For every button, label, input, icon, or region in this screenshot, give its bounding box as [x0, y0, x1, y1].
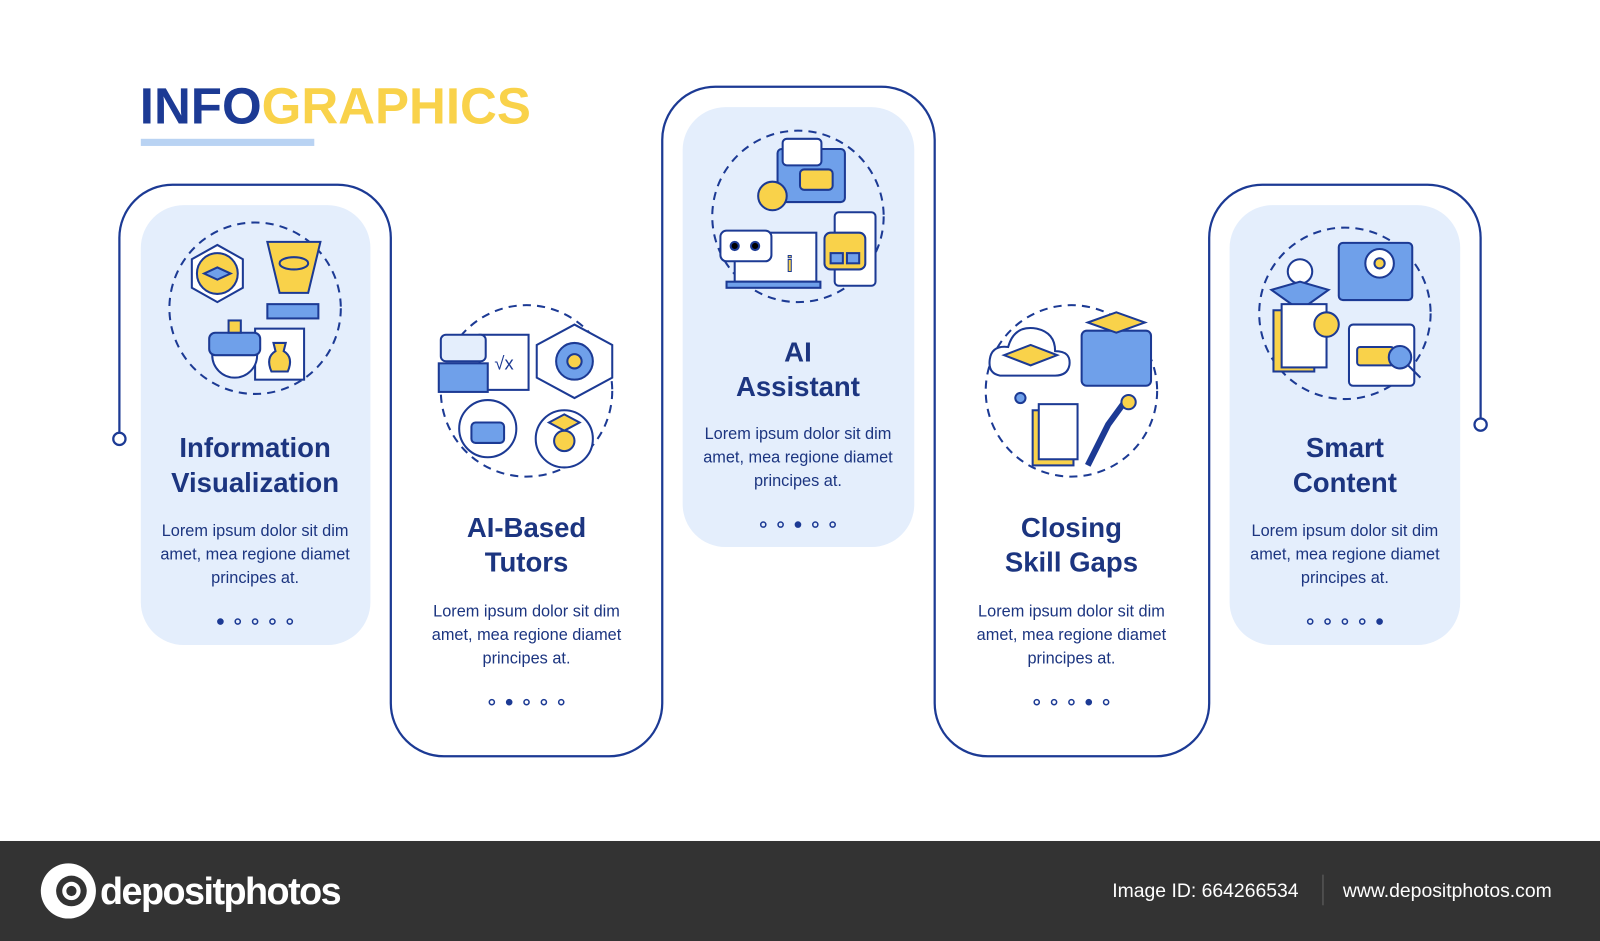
heading: Closing [1021, 512, 1122, 543]
text block: Lorem ipsum dolor sit dim [705, 425, 891, 443]
icon: camera logo [41, 863, 96, 919]
text block [703, 425, 893, 490]
text block: principes at. [483, 649, 571, 667]
panel: Closing Skill Gaps [977, 305, 1167, 705]
text block [432, 602, 622, 667]
panel: AI Assistant [703, 131, 893, 527]
text block: Lorem ipsum dolor sit dim [978, 602, 1165, 620]
panel: AI Assistant: Assistant [736, 371, 860, 402]
text block [160, 522, 350, 587]
dots [1034, 700, 1109, 705]
heading: Smart [1306, 432, 1384, 463]
icon: information visualization [169, 222, 341, 394]
text block: amet, mea regione diamet [703, 448, 893, 466]
connecting outline [113, 87, 1487, 756]
icon: smart content [1259, 228, 1431, 399]
icon: ai assistant [712, 131, 884, 302]
panel: AI-Based Tutors: Tutors [485, 547, 568, 578]
heading: AI [784, 336, 812, 367]
text block: Lorem ipsum dolor sit dim [433, 602, 620, 620]
panel: Information Visualization [160, 222, 350, 624]
text block: Lorem ipsum dolor sit dim [1252, 522, 1438, 540]
text block [977, 602, 1167, 667]
icon: skill gaps [986, 305, 1157, 477]
icon: ai tutors [439, 305, 612, 477]
dots [489, 700, 564, 705]
text block: Lorem ipsum dolor sit dim [162, 522, 348, 540]
text block: principes at. [754, 472, 842, 490]
heading: AI-Based [467, 512, 586, 543]
panel: Information Visualization: Visualization [171, 467, 339, 498]
text block: principes at. [1301, 569, 1389, 587]
text block: principes at. [1027, 649, 1115, 667]
text block: amet, mea regione diamet [1250, 545, 1440, 563]
icon: ai tutors: √x [494, 352, 514, 373]
text block: amet, mea regione diamet [432, 626, 622, 644]
dots [218, 619, 292, 624]
website: www.depositphotos.com [1342, 880, 1552, 902]
text block: principes at. [211, 569, 299, 587]
title: INFOGRAPHICS [140, 77, 531, 134]
heading: Information [179, 432, 331, 463]
panel: Smart Content [1250, 228, 1440, 624]
panel fills [141, 107, 1460, 645]
footer [0, 841, 1600, 941]
panel: Closing Skill Gaps: Skill Gaps [1005, 547, 1138, 578]
dots [1308, 619, 1382, 624]
dots [761, 522, 835, 527]
text block: amet, mea regione diamet [160, 545, 350, 563]
image id: Image ID: 664266534 [1112, 880, 1299, 902]
text block [1250, 522, 1440, 587]
panel: Smart Content: Content [1293, 467, 1397, 498]
panel: AI-Based Tutors [432, 305, 622, 705]
text block: amet, mea regione diamet [977, 626, 1167, 644]
brand text: depositphotos [100, 870, 341, 912]
icon: ai assistant: i [787, 251, 793, 276]
